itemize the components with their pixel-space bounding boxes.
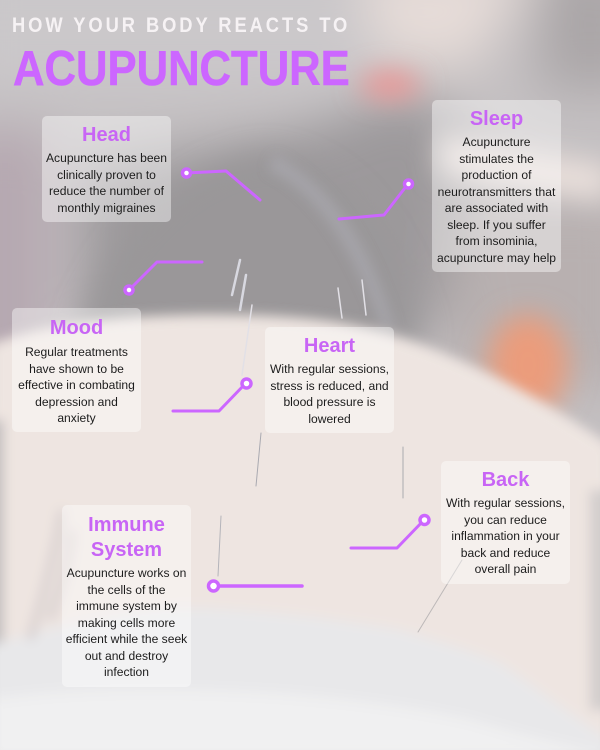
- title: how your body reacts to: HOW YOUR BODY REACTS TO: [12, 14, 350, 37]
- text: sleep description: stimulates the: [459, 152, 534, 166]
- text: heart description: [270, 362, 389, 426]
- heading: immune system: [88, 514, 165, 561]
- text: mood description: effective in combating: [18, 378, 135, 392]
- text: mood description: Regular treatments: [25, 345, 128, 359]
- text: immune system description: [66, 566, 188, 679]
- text: immune system description: efficient while the seek: [66, 632, 187, 646]
- text: immune system description: the cells of the: [88, 582, 165, 596]
- text: heart description: blood pressure is: [283, 395, 376, 409]
- heading: sleep: Sleep: [470, 108, 523, 130]
- text: immune system description: infection: [104, 665, 149, 679]
- text: sleep description: sleep. If you suffer: [447, 218, 546, 232]
- text: head description: [46, 151, 167, 214]
- title: acupuncture: ACUPUNCTURE: [13, 42, 350, 96]
- text: back description: back and reduce: [461, 546, 550, 560]
- text: heart description: stress is reduced, and: [270, 378, 389, 392]
- text: sleep description: [437, 135, 556, 264]
- text: heart description: With regular sessions,: [270, 362, 389, 376]
- text: back description: you can reduce: [464, 512, 547, 526]
- text: sleep description: are associated with: [445, 201, 548, 215]
- connector: heart: [173, 379, 251, 411]
- text: immune system description: immune system by: [76, 599, 177, 613]
- text: back description: [446, 496, 565, 576]
- text: sleep description: production of: [462, 168, 531, 182]
- text: mood description: depression and: [35, 394, 118, 408]
- text: head description: clinically proven to: [57, 168, 156, 182]
- panel: heart: [265, 327, 394, 433]
- text: sleep description: Acupuncture: [463, 135, 530, 149]
- connector: head: [182, 169, 260, 200]
- heading: heart: Heart: [304, 335, 355, 357]
- text: mood description: [18, 345, 135, 425]
- text: head description: monthly migraines: [57, 200, 156, 214]
- text: immune system description: Acupuncture works on: [67, 566, 186, 580]
- connector: sleep: [339, 180, 412, 219]
- panel: head: [42, 116, 171, 222]
- connector: mood: [125, 262, 202, 294]
- heading: head: Head: [82, 124, 131, 146]
- text: back description: inflammation in your: [451, 529, 560, 543]
- heading: mood: Mood: [50, 317, 103, 339]
- text: head description: Acupuncture has been: [46, 151, 167, 165]
- panel: back: [441, 461, 570, 584]
- text: immune system description: out and destroy: [85, 648, 168, 662]
- text: head description: reduce the number of: [49, 184, 164, 198]
- heading: back: Back: [482, 469, 529, 491]
- connector: immune system: [208, 581, 302, 591]
- panel: immune system: [62, 505, 191, 687]
- panel: mood: [12, 308, 141, 432]
- text: back description: With regular sessions,: [446, 496, 565, 510]
- text: sleep description: neurotransmitters that: [438, 184, 555, 198]
- text: immune system description: making cells more: [78, 616, 175, 630]
- connector: back: [351, 516, 429, 548]
- text: sleep description: from insominia,: [456, 234, 538, 248]
- panel: sleep: [432, 100, 561, 272]
- text: sleep description: acupuncture may help: [437, 250, 556, 264]
- text: back description: overall pain: [475, 562, 536, 576]
- heading: immune system: System: [91, 539, 162, 561]
- heading: immune system: Immune: [88, 514, 165, 536]
- text: mood description: anxiety: [57, 411, 96, 425]
- text: mood description: have shown to be: [29, 362, 124, 376]
- text: heart description: lowered: [308, 412, 351, 426]
